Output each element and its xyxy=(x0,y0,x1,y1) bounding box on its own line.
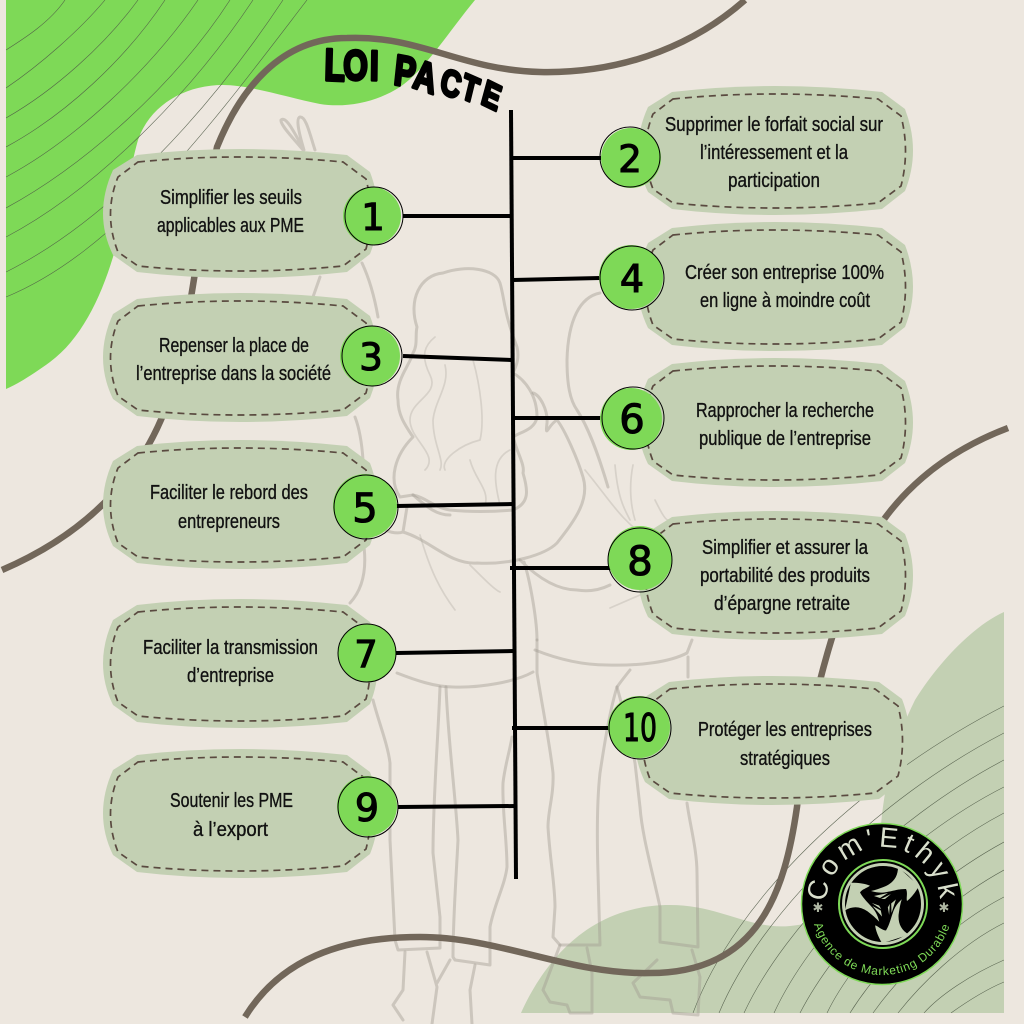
panel 2: l’intéressement et la xyxy=(700,142,849,164)
central vertical spine xyxy=(511,110,516,879)
logo hands xyxy=(834,867,923,953)
panel 9 xyxy=(103,749,516,878)
panel 2: 2 xyxy=(618,138,642,181)
panel 4 xyxy=(513,222,913,351)
panel 6 xyxy=(513,358,913,487)
panel 7: d’entreprise xyxy=(187,665,274,687)
panel 4: 4 xyxy=(620,257,644,301)
panel 8: 8 xyxy=(627,539,653,585)
panel 6: publique de l’entreprise xyxy=(699,428,871,450)
panel 4: en ligne à moindre coût xyxy=(700,290,870,312)
panel 5: 5 xyxy=(352,486,378,532)
title: T xyxy=(458,66,483,112)
panel 5 xyxy=(103,440,513,569)
brown curved line bottom-right xyxy=(245,428,1008,1017)
panel 10: Protéger les entreprises xyxy=(698,719,872,741)
panel 9: Soutenir les PME xyxy=(170,790,293,812)
panel 2: Supprimer le forfait social sur xyxy=(665,114,883,136)
title: A xyxy=(410,50,441,103)
panel 1: 1 xyxy=(361,196,385,239)
title: I xyxy=(370,42,379,89)
panel 2: participation xyxy=(728,170,820,192)
logo left star: ✱ xyxy=(813,901,823,916)
silhouette of two people seen from behind xyxy=(281,117,700,1024)
panel 4: Créer son entreprise 100% xyxy=(685,262,884,284)
green organic shape top-left xyxy=(6,0,475,389)
panel 5: entrepreneurs xyxy=(178,511,280,533)
panel 1 xyxy=(103,149,511,278)
panel 3 xyxy=(103,293,512,422)
hatch lines bottom-right xyxy=(693,706,1004,1013)
panel 9: 9 xyxy=(355,786,379,830)
panel 3: 3 xyxy=(359,336,383,379)
logo right star: ✱ xyxy=(939,901,949,916)
title: L xyxy=(324,40,346,91)
title: O xyxy=(343,41,368,89)
title: P xyxy=(392,47,418,98)
sage organic shape bottom-right xyxy=(521,612,1004,1013)
panel 10: stratégiques xyxy=(740,748,830,770)
logo tagline on arc: Agence de Marketing Durable xyxy=(814,924,949,976)
brown curved line top-left xyxy=(2,0,745,570)
panel 1: applicables aux PME xyxy=(157,215,304,237)
panel 7: 7 xyxy=(354,633,378,676)
title: C xyxy=(437,59,465,107)
panel 7: Faciliter la transmission xyxy=(143,637,318,659)
panel 6: 6 xyxy=(619,397,645,443)
panel 6: Rapprocher la recherche xyxy=(696,400,874,422)
logo Com'Ethyk xyxy=(800,822,964,986)
logo name on arc: Com'Ethyk xyxy=(808,827,958,900)
hatch lines top-left xyxy=(6,0,307,297)
panel 1: Simplifier les seuils xyxy=(160,187,302,209)
panel 3: l’entreprise dans la société xyxy=(136,363,331,385)
panel 8: portabilité des produits xyxy=(700,565,870,587)
panel 8 xyxy=(510,511,913,640)
panel 2 xyxy=(512,86,913,215)
panel 5: Faciliter le rebord des xyxy=(150,482,308,504)
panel 10 xyxy=(512,676,910,805)
panel 8: d’épargne retraite xyxy=(714,593,850,615)
panel 3: Repenser la place de xyxy=(159,335,309,357)
panel 7 xyxy=(103,599,514,728)
panel 8: Simplifier et assurer la xyxy=(702,537,869,559)
panel 9: à l’export xyxy=(193,819,268,841)
panel 10: 10 xyxy=(623,706,657,750)
title: E xyxy=(478,72,505,119)
